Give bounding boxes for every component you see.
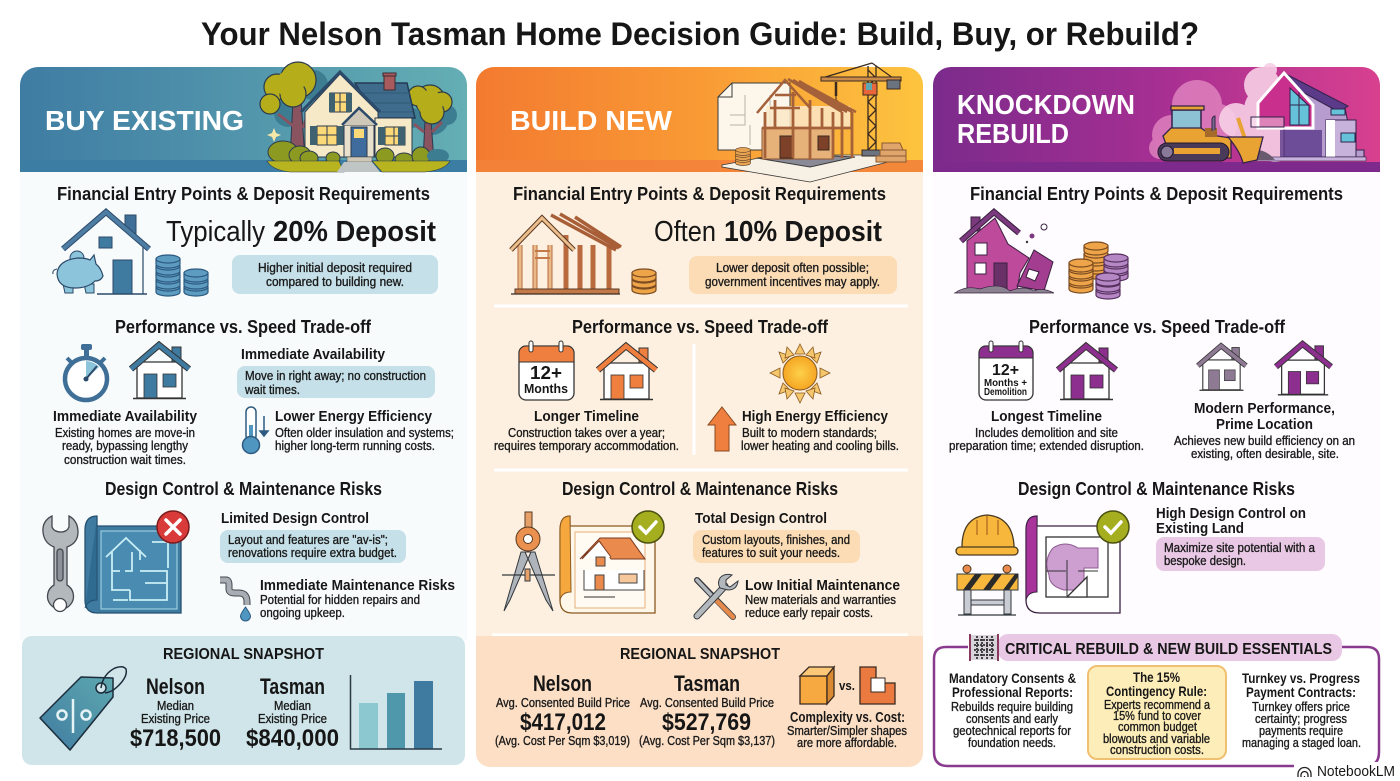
- heading: design: Design Control & Maintenance Risks: [105, 479, 382, 499]
- block: high design control: [1156, 505, 1325, 571]
- icon: drafting compass: [502, 512, 555, 611]
- stat: tasman median: Existing Price: [258, 711, 327, 726]
- icon: small house: [131, 345, 189, 398]
- icon: calendar with demolition: Demolition: [984, 387, 1027, 398]
- block: mandatory consents: Professional Reports:: [952, 684, 1073, 700]
- stat: tasman median: Median: [274, 698, 311, 713]
- stat: nelson build: $417,012: [520, 709, 606, 736]
- deposit headline: Typically: [166, 216, 265, 248]
- block: high energy efficiency: [741, 408, 899, 453]
- icon: simple cube vs complex shape: vs.: [839, 678, 855, 693]
- stat: tasman median: [246, 674, 339, 752]
- stat: tasman build: Avg. Consented Build Price: [640, 695, 774, 710]
- title: Your Nelson Tasman Home Decision Guide: Build, Buy, or Rebuild?: [201, 16, 1199, 52]
- block: modern performance: Achieves new build efficiency on an: [1174, 433, 1355, 448]
- bar chart: [350, 675, 442, 749]
- icon: wrench: [43, 516, 78, 612]
- block: longest timeline: preparation time; extended disruption.: [949, 438, 1144, 453]
- callout: deposit note: [689, 256, 897, 294]
- heading: performance: Performance vs. Speed Trade-off: [115, 317, 372, 337]
- header: knockdown rebuild: REBUILD: [957, 118, 1069, 149]
- icon: purple house: [1058, 346, 1116, 400]
- deposit headline: [654, 216, 882, 248]
- heading: financial entry: Financial Entry Points & Deposit Requirements: [513, 184, 886, 204]
- block: longest timeline: [949, 408, 1144, 453]
- callout: 15% contingency: [1088, 666, 1226, 759]
- block: longest timeline: Longest Timeline: [991, 408, 1102, 425]
- panel: regional snapshot buy: REGIONAL SNAPSHOT: [163, 646, 324, 663]
- deposit headline: 10% Deposit: [724, 216, 882, 248]
- icon: calendar 12+ months: [519, 341, 574, 400]
- callout: deposit note: Lower deposit often possible;: [716, 260, 869, 275]
- block: high design control: Maximize site potential with a: [1164, 540, 1316, 555]
- heading: performance: Performance vs. Speed Trade-off: [1029, 317, 1286, 337]
- watermark: NotebookLM: NotebookLM: [1317, 763, 1395, 780]
- block: immediate availability: Immediate Availability: [53, 408, 198, 425]
- block: lower energy efficiency: Often older insulation and systems;: [275, 425, 454, 440]
- block: longer timeline: Longer Timeline: [534, 408, 639, 425]
- block: high design control: Existing Land: [1156, 520, 1244, 537]
- callout: deposit note: Higher initial deposit required: [258, 260, 412, 275]
- block: mandatory consents: [949, 670, 1076, 750]
- heading: financial entry: Financial Entry Points & Deposit Requirements: [970, 184, 1343, 204]
- block: complexity vs cost: [787, 710, 907, 750]
- panel: buy existing: [20, 62, 467, 765]
- stat: tasman build: $527,769: [662, 709, 751, 736]
- stat: nelson build: Nelson: [533, 671, 592, 696]
- banner heading: CRITICAL REBUILD & NEW BUILD ESSENTIALS: [1005, 641, 1332, 658]
- icon: site plan with check: [1026, 511, 1129, 613]
- block: turnkey vs progress: [1242, 670, 1361, 750]
- block: lower energy efficiency: Lower Energy Efficiency: [275, 408, 433, 425]
- header: knockdown rebuild: [933, 63, 1380, 172]
- block: immediate maintenance: Potential for hidden repairs and: [260, 592, 420, 607]
- block: limited design control: Limited Design Control: [221, 510, 369, 527]
- block: high design control: High Design Control on: [1156, 505, 1306, 522]
- block: mandatory consents: foundation needs.: [968, 735, 1056, 750]
- callout: 15% contingency: Experts recommend a: [1104, 697, 1211, 712]
- panel: regional snapshot build: REGIONAL SNAPSHOT: [620, 646, 780, 663]
- block: mandatory consents: consents and early: [966, 711, 1058, 726]
- callout: immediate availability: Immediate Availability: [241, 346, 386, 363]
- block: limited design control: [220, 510, 406, 563]
- panel: knockdown rebuild: [933, 63, 1380, 766]
- icon: hard hat: [956, 515, 1018, 555]
- block: high energy efficiency: lower heating and cooling bills.: [741, 438, 899, 453]
- panel: build new: [476, 63, 923, 767]
- icon: calendar 12+ months: Months: [524, 382, 568, 396]
- block: modern performance: existing, often desirable, site.: [1191, 446, 1339, 461]
- deposit headline: [166, 216, 436, 248]
- stat: tasman build: [639, 671, 775, 748]
- stat: nelson build: [495, 671, 630, 748]
- illustration: suburban house with trees: [260, 62, 457, 172]
- icon: crossed tools: [697, 574, 738, 617]
- stat: tasman build: (Avg. Cost Per Sqm $3,137): [639, 733, 775, 748]
- icon: coin stack: [632, 269, 656, 294]
- block: modern performance: [1174, 400, 1355, 461]
- icon: barricade: [957, 565, 1018, 615]
- block: total design control: features to suit your needs.: [702, 545, 840, 560]
- block: modern performance: Modern Performance,: [1194, 400, 1335, 417]
- icon: thermometer: [242, 407, 268, 454]
- block: longest timeline: Includes demolition and site: [975, 425, 1118, 440]
- icon: calendar with demolition: 12+: [992, 362, 1019, 379]
- block: high energy efficiency: High Energy Efficiency: [742, 408, 889, 425]
- block: lower energy efficiency: [275, 408, 454, 453]
- callout: 15% contingency: 15% fund to cover: [1113, 708, 1202, 723]
- icon: calendar with demolition: [979, 341, 1033, 400]
- block: high energy efficiency: Built to modern standards;: [742, 425, 877, 440]
- icon: sun: [770, 344, 830, 403]
- stat: nelson median: Nelson: [146, 674, 205, 699]
- stat: tasman build: Tasman: [674, 671, 740, 696]
- callout: deposit note: government incentives may apply.: [705, 274, 880, 289]
- header: buy existing: BUY EXISTING: [45, 105, 244, 136]
- banner heading: [998, 634, 1342, 661]
- callout: deposit note: compared to building new.: [266, 274, 404, 289]
- callout: immediate availability: Move in right away; no construction: [245, 368, 426, 383]
- stat: nelson median: $718,500: [130, 725, 221, 752]
- block: total design control: [693, 510, 860, 563]
- block: immediate maintenance: [260, 577, 455, 620]
- icon: leaking pipe: [220, 580, 251, 621]
- block: immediate availability: Existing homes are move-in: [55, 425, 195, 440]
- block: limited design control: renovations require extra budget.: [228, 545, 397, 560]
- callout: 15% contingency: The 15%: [1133, 669, 1180, 685]
- stat: nelson build: (Avg. Cost Per Sqm $3,019): [495, 733, 630, 748]
- crane: [821, 63, 901, 156]
- header: build new: BUILD NEW: [510, 105, 673, 136]
- block: immediate availability: construction wait times.: [64, 452, 186, 467]
- icon: mixed coin stacks: [1069, 242, 1128, 299]
- block: immediate availability: [53, 408, 198, 467]
- deposit headline: 20% Deposit: [273, 216, 436, 248]
- icon: new purple house: [1276, 344, 1331, 395]
- block: turnkey vs progress: Payment Contracts:: [1246, 684, 1356, 700]
- block: mandatory consents: geotechnical reports for: [953, 723, 1072, 738]
- header: buy existing: [20, 62, 467, 172]
- block: longer timeline: Construction takes over a year;: [508, 425, 665, 440]
- stat: nelson median: [130, 674, 221, 752]
- block: total design control: Total Design Control: [695, 510, 827, 527]
- block: turnkey vs progress: managing a staged loan.: [1242, 735, 1361, 750]
- block: limited design control: Layout and features are "av-is";: [228, 532, 388, 547]
- header: knockdown rebuild: KNOCKDOWN: [957, 89, 1135, 120]
- stat: nelson median: Existing Price: [141, 711, 210, 726]
- icon: house, piggy bank and coins: [53, 212, 208, 296]
- block: immediate availability: ready, bypassing lengthy: [62, 438, 188, 453]
- callout: 15% contingency: Contingency Rule:: [1106, 683, 1207, 699]
- block: high design control: bespoke design.: [1164, 553, 1246, 568]
- icon: simple cube vs complex shape: [800, 667, 895, 704]
- icon: calendar with demolition: Months +: [984, 377, 1027, 389]
- panel: regional snapshot build: [476, 636, 923, 767]
- block: turnkey vs progress: certainty; progress: [1255, 711, 1347, 726]
- block: low initial maintenance: New materials and warranties: [745, 592, 896, 607]
- icon: calendar 12+ months: 12+: [530, 363, 562, 383]
- stat: nelson build: Avg. Consented Build Price: [496, 695, 630, 710]
- icon: house plan with check: [560, 511, 664, 613]
- heading: financial entry: Financial Entry Points & Deposit Requirements: [57, 184, 430, 204]
- block: immediate maintenance: ongoing upkeep.: [260, 605, 345, 620]
- icon: damaged house: [954, 212, 1054, 293]
- icon: blueprint with cross: [85, 511, 189, 613]
- block: turnkey vs progress: payments require: [1259, 723, 1343, 738]
- deposit headline: Often: [654, 216, 716, 248]
- heading: design: Design Control & Maintenance Risks: [1018, 479, 1295, 499]
- panel: regional snapshot buy: [22, 636, 465, 765]
- block: immediate maintenance: Immediate Maintenance Risks: [260, 577, 455, 594]
- stat: nelson median: Median: [157, 698, 194, 713]
- block: mandatory consents: Rebuilds require building: [951, 699, 1073, 714]
- stat: tasman median: Tasman: [260, 674, 325, 699]
- header: build new: [476, 63, 923, 182]
- block: total design control: Custom layouts, finishes, and: [702, 532, 850, 547]
- block: turnkey vs progress: Turnkey offers price: [1252, 699, 1350, 714]
- callout: 15% contingency: common budget: [1118, 719, 1197, 734]
- callout: 15% contingency: construction costs.: [1110, 742, 1204, 757]
- block: longer timeline: requires temporary accommodation.: [494, 438, 679, 453]
- icon: orange house: [598, 346, 656, 400]
- stat: tasman median: $840,000: [246, 725, 339, 752]
- block: complexity vs cost: Complexity vs. Cost:: [790, 710, 905, 726]
- callout: 15% contingency: blowouts and variable: [1103, 731, 1210, 746]
- block: modern performance: Prime Location: [1216, 416, 1313, 433]
- block: low initial maintenance: reduce early repair costs.: [745, 605, 873, 620]
- icon: net barrier: [970, 634, 998, 661]
- callout: immediate availability: [237, 346, 435, 398]
- block: turnkey vs progress: Turnkey vs. Progress: [1242, 670, 1360, 686]
- panel: critical essentials: [934, 634, 1379, 766]
- icon: up arrow: [708, 407, 736, 451]
- icon: price tag: [40, 667, 126, 750]
- callout: deposit note: [232, 255, 438, 294]
- icon: timber frame house: [511, 214, 621, 294]
- block: lower energy efficiency: higher long-term running costs.: [275, 438, 435, 453]
- heading: performance: Performance vs. Speed Trade-off: [572, 317, 829, 337]
- block: low initial maintenance: [745, 577, 900, 620]
- block: low initial maintenance: Low Initial Maintenance: [745, 577, 900, 594]
- block: complexity vs cost: Smarter/Simpler shapes: [787, 723, 907, 738]
- callout: immediate availability: wait times.: [244, 382, 300, 397]
- icon: stopwatch: [65, 344, 107, 400]
- illustration: bulldozer and new house: [1149, 63, 1366, 163]
- block: complexity vs cost: are more affordable.: [797, 735, 897, 750]
- heading: design: Design Control & Maintenance Risks: [562, 479, 838, 499]
- icon: old house: [1198, 346, 1246, 390]
- block: mandatory consents: Mandatory Consents &: [949, 670, 1076, 686]
- block: longer timeline: [494, 408, 679, 453]
- illustration: timber frame and crane: [718, 63, 906, 182]
